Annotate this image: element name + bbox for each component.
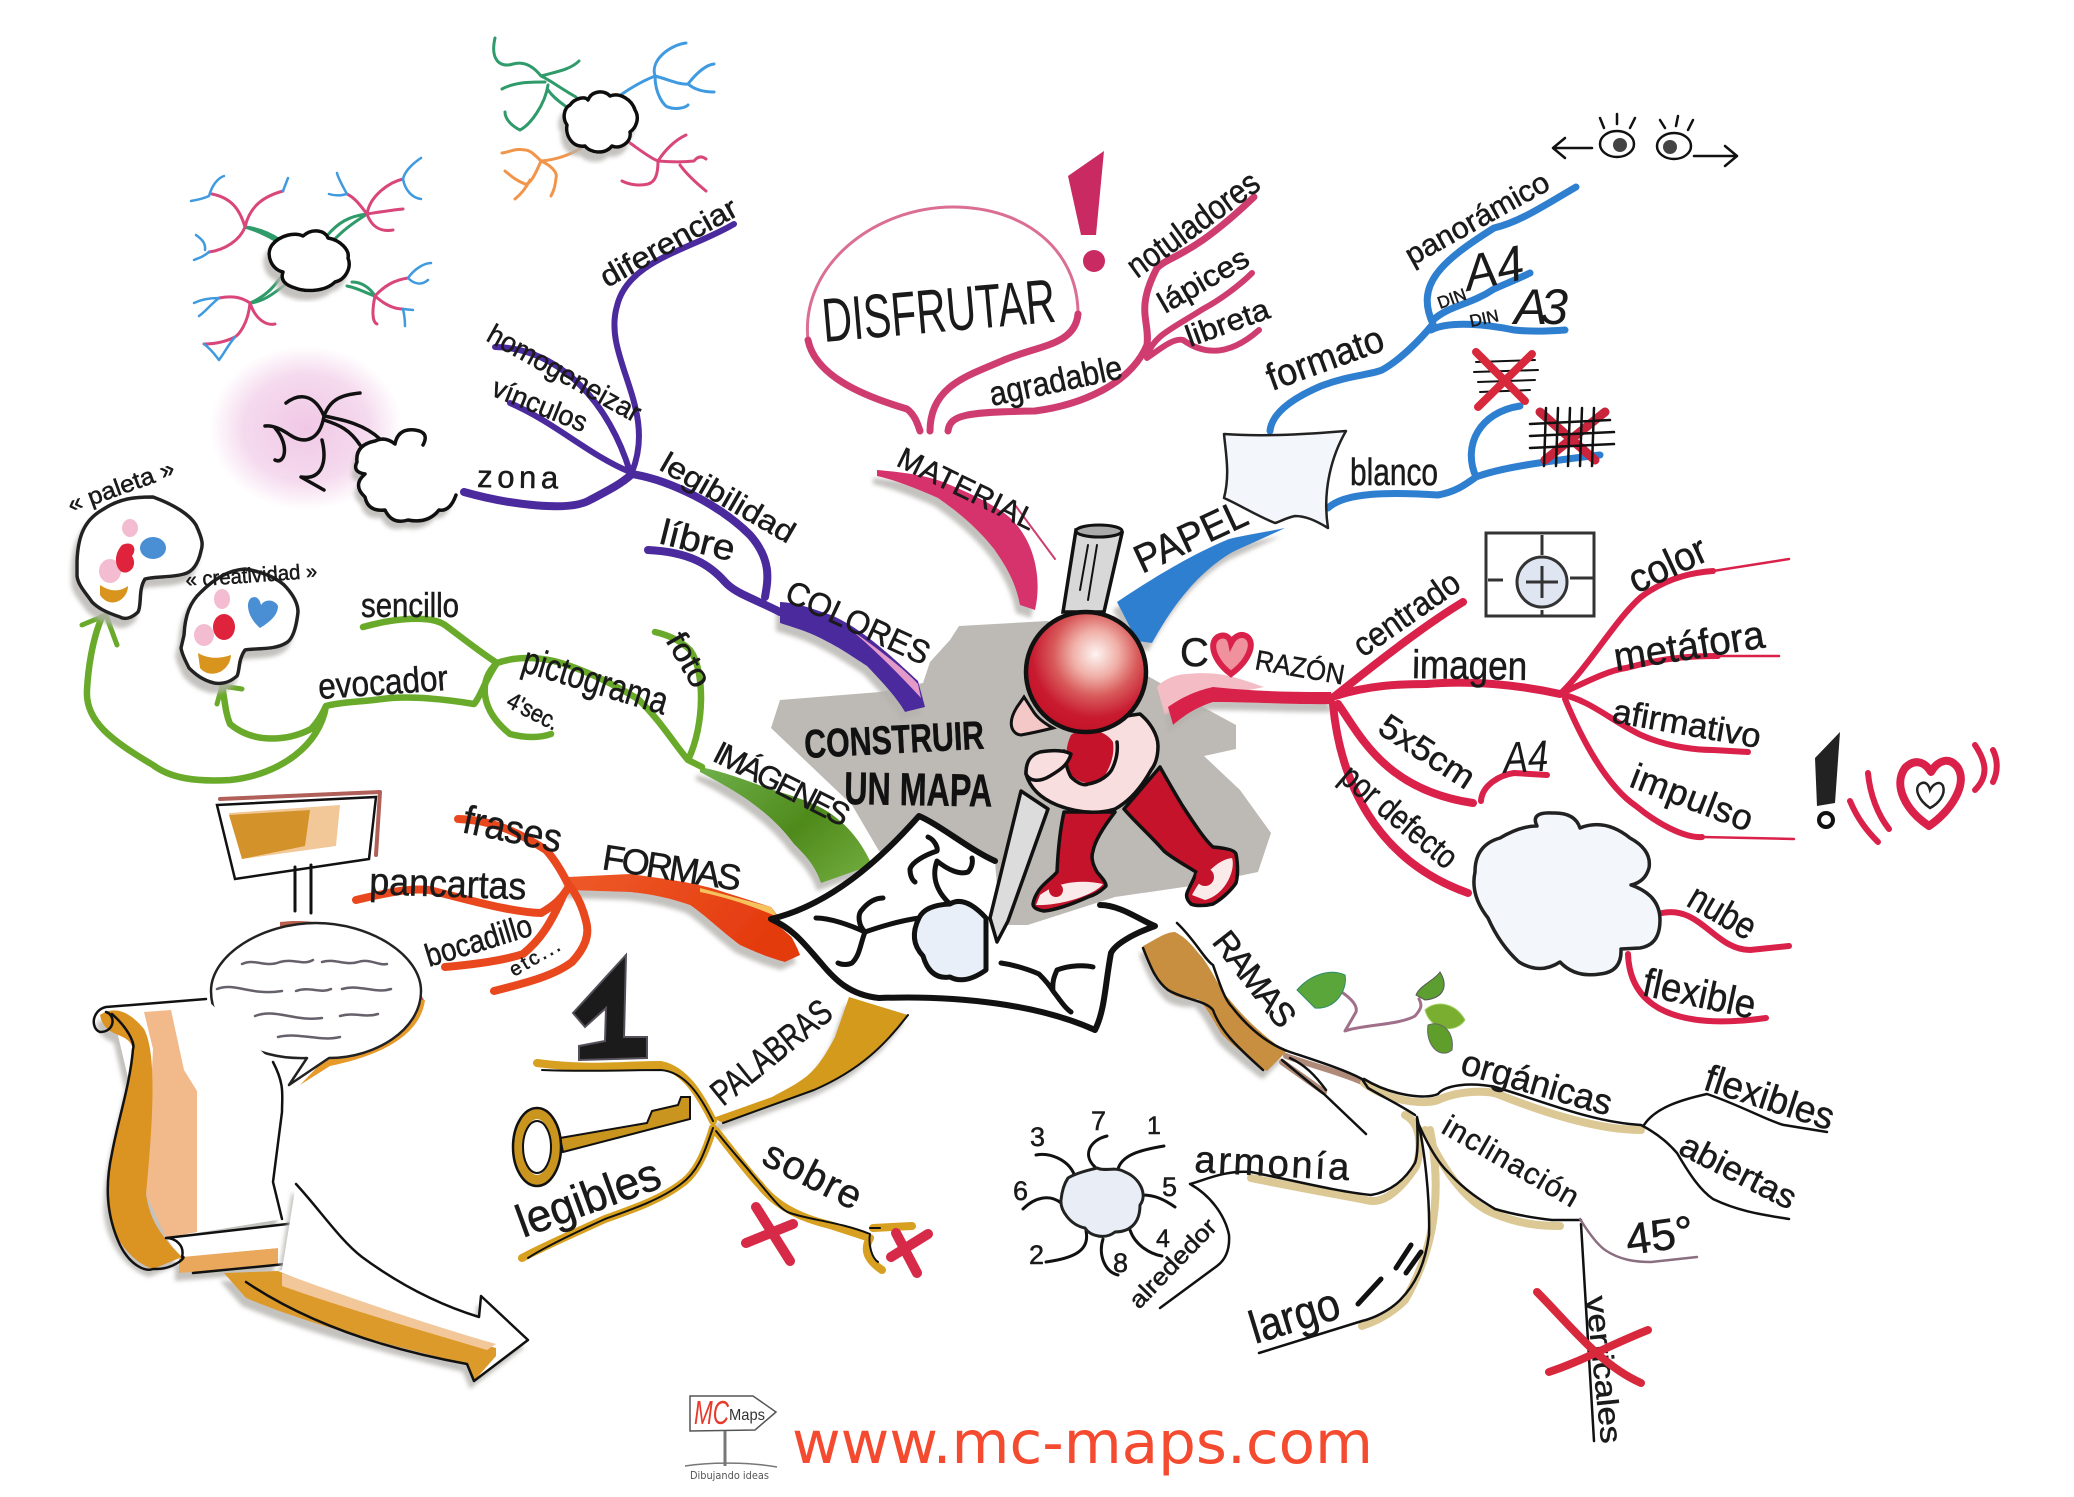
icon: cloud with numbered branches: 5: [1162, 1172, 1177, 1202]
label: corazon: A4: [1499, 732, 1549, 783]
nose / ear: [1011, 697, 1053, 735]
label: formas: frases: [459, 798, 566, 862]
label: ramas: abiertas: [1673, 1126, 1803, 1217]
label: imagenes: 4'sec.: [502, 687, 564, 736]
icon: speech bubble with wavy lines: [211, 921, 425, 1085]
label: colores: [477, 192, 936, 672]
mini mind map: top left: [191, 158, 431, 360]
label: ramas: flexibles: [1699, 1058, 1840, 1139]
icon: key: [513, 1097, 690, 1186]
label: imagenes: sencillo: [361, 587, 459, 625]
label: ramas: 45°: [1623, 1207, 1697, 1265]
title: CONSTRUIR: [803, 714, 985, 767]
label: colores: líbre: [656, 511, 740, 569]
logo: MC maps: [685, 1394, 777, 1482]
title: [803, 714, 993, 817]
label: papel: blanco: [1350, 452, 1438, 494]
label: material: [892, 164, 1274, 537]
label: ramas: RAMAS: [1205, 924, 1304, 1035]
inner arm line: [1064, 742, 1117, 785]
head: [1026, 612, 1146, 732]
branch: material (crimson): [877, 197, 1259, 610]
label: corazon: afirmativo: [1610, 692, 1764, 756]
label: formas: pancartas: [369, 861, 527, 908]
legs: [1033, 767, 1238, 911]
label: papel: A3: [1511, 279, 1568, 335]
label: corazon: nube: [1680, 876, 1764, 949]
icon: signpost: [217, 792, 380, 913]
label: colores: zona: [477, 459, 559, 495]
website url: www.mc-maps.com: [792, 1408, 1373, 1477]
label: colores: diferenciar: [594, 192, 743, 294]
label: corazon: RAZÓN: [1253, 644, 1347, 691]
pink glow with tree sketch and cloud: [210, 346, 456, 521]
icon: eyes looking left and right: [1553, 114, 1737, 166]
icon: cloud with numbered branches: 8: [1113, 1248, 1128, 1278]
icon: centred image frame: [1486, 533, 1594, 616]
label: formas: bocadillo: [421, 907, 536, 974]
icon: large cloud: [1474, 813, 1660, 975]
icon: pink exclamation mark: [1068, 151, 1105, 272]
icon: cloud with numbered branches: 6: [1013, 1176, 1028, 1206]
label: material: agradable: [986, 349, 1126, 414]
central figure: [1011, 525, 1238, 911]
label: corazon: impulso: [1625, 755, 1759, 839]
paper with mini map: [771, 816, 1155, 1030]
label: imagenes: pictograma: [517, 639, 674, 724]
icon: cloud with numbered branches: 3: [1030, 1122, 1045, 1152]
icon: big number one: [573, 955, 647, 1060]
branch: papel (blue): [1117, 187, 1600, 643]
label: colores: COLORES: [780, 573, 936, 672]
grey marker patch behind the centre: [771, 621, 1271, 930]
label: ramas: inclinación: [1436, 1109, 1585, 1214]
label: ramas: [1124, 924, 1840, 1445]
icon: palette: « paleta »: [64, 455, 178, 519]
label: material: notuladores: [1119, 164, 1267, 285]
label: colores: legibilidad: [654, 446, 801, 550]
label: ramas: alrededor: [1124, 1213, 1223, 1314]
label: corazon: metáfora: [1611, 613, 1768, 680]
label: imagenes: evocador: [317, 657, 449, 707]
label: papel: formato: [1261, 318, 1390, 399]
label: palabras: legibles: [509, 1147, 667, 1247]
label: formas: etc...: [506, 935, 564, 981]
label: material: libreta: [1181, 293, 1274, 354]
label: imagenes: IMÁGENES: [708, 734, 856, 833]
speech bubble: disfrutar: DISFRUTAR: [819, 267, 1058, 356]
label: ramas: armonía: [1194, 1139, 1351, 1189]
label: corazon: centrado: [1346, 563, 1468, 665]
label: imagenes: foto: [659, 626, 719, 694]
label: corazon: por defecto: [1333, 757, 1465, 877]
branch: imagenes (green): [82, 615, 872, 883]
label: ramas: verticales: [1579, 1294, 1627, 1445]
label: formas: [369, 798, 744, 981]
title: UN MAPA: [844, 762, 993, 817]
label: palabras: sobre: [756, 1132, 869, 1219]
mini mind map: top centre: [494, 38, 714, 199]
logo: MC maps: MC: [694, 1394, 730, 1431]
label: material: lápices: [1152, 241, 1255, 320]
icon: scroll: [94, 999, 304, 1273]
icon: creativity palette: « creatividad »: [185, 560, 318, 592]
icon: crossed out lined sheet: [1474, 352, 1538, 407]
branch: colores (purple): [464, 224, 925, 712]
pen upper part: [1063, 525, 1122, 612]
icon: cloud with numbered branches: 7: [1091, 1106, 1106, 1136]
icon: creativity palette: [181, 560, 318, 683]
label: corazon: C: [1180, 631, 1209, 675]
icon: red cross over verticales: [1537, 1292, 1648, 1383]
label: colores: vínculos: [488, 372, 592, 438]
label: corazon: imagen: [1412, 643, 1528, 689]
label: formas: FORMAS: [600, 836, 744, 899]
icon: palette: [64, 455, 202, 618]
logo: MC maps: Maps: [729, 1407, 765, 1424]
icon: cloud with numbered branches: [1013, 1106, 1177, 1278]
torso and arm: [1026, 714, 1158, 812]
icon: leafy branch: [1297, 972, 1465, 1053]
icon: cloud with numbered branches: 2: [1029, 1240, 1044, 1270]
label: colores: homogeneizar: [482, 318, 647, 428]
speech bubble: disfrutar: [807, 207, 1078, 431]
icon: cloud with numbered branches: 4: [1156, 1225, 1170, 1253]
label: imagenes: [317, 587, 856, 833]
marks: long dash and equals: [1358, 1245, 1421, 1304]
label: ramas: orgánicas: [1457, 1041, 1617, 1123]
branch: formas (orange): [356, 819, 800, 991]
icon: red crosses: [746, 1207, 928, 1273]
label: papel: panorámico: [1399, 166, 1555, 272]
icon: cloud with numbered branches: 1: [1147, 1112, 1161, 1140]
branch: palabras (gold): [522, 997, 912, 1270]
label: material: MATERIAL: [892, 442, 1041, 537]
label: papel: DIN: [1435, 285, 1469, 313]
label: corazon: flexible: [1639, 961, 1760, 1028]
label: corazon: color: [1621, 528, 1714, 602]
label: papel: A4: [1456, 235, 1529, 302]
torso shading: [1066, 730, 1113, 784]
label: palabras: [509, 991, 869, 1247]
branch: corazon (red): [1157, 559, 1794, 1021]
label: palabras: PALABRAS: [702, 991, 840, 1113]
logo: MC maps: Dibujando ideas: [690, 1469, 769, 1482]
icon: crossed out grid sheet: [1530, 408, 1614, 466]
icon: arrow: [224, 1184, 528, 1381]
icon: heart with exclamation: [1815, 732, 1997, 842]
branch: ramas (brown): [1143, 923, 1827, 1441]
label: corazon: 5x5cm: [1372, 707, 1482, 797]
pen lower part: [990, 791, 1048, 942]
label: papel: DIN: [1468, 306, 1500, 331]
label: corazon: [1180, 528, 1768, 1028]
hand on pen: [1026, 751, 1071, 780]
label: ramas: largo: [1243, 1277, 1346, 1354]
label: papel: PAPEL: [1127, 492, 1255, 582]
icon: sheet of paper: [1224, 431, 1346, 528]
label: papel: [1127, 166, 1568, 582]
